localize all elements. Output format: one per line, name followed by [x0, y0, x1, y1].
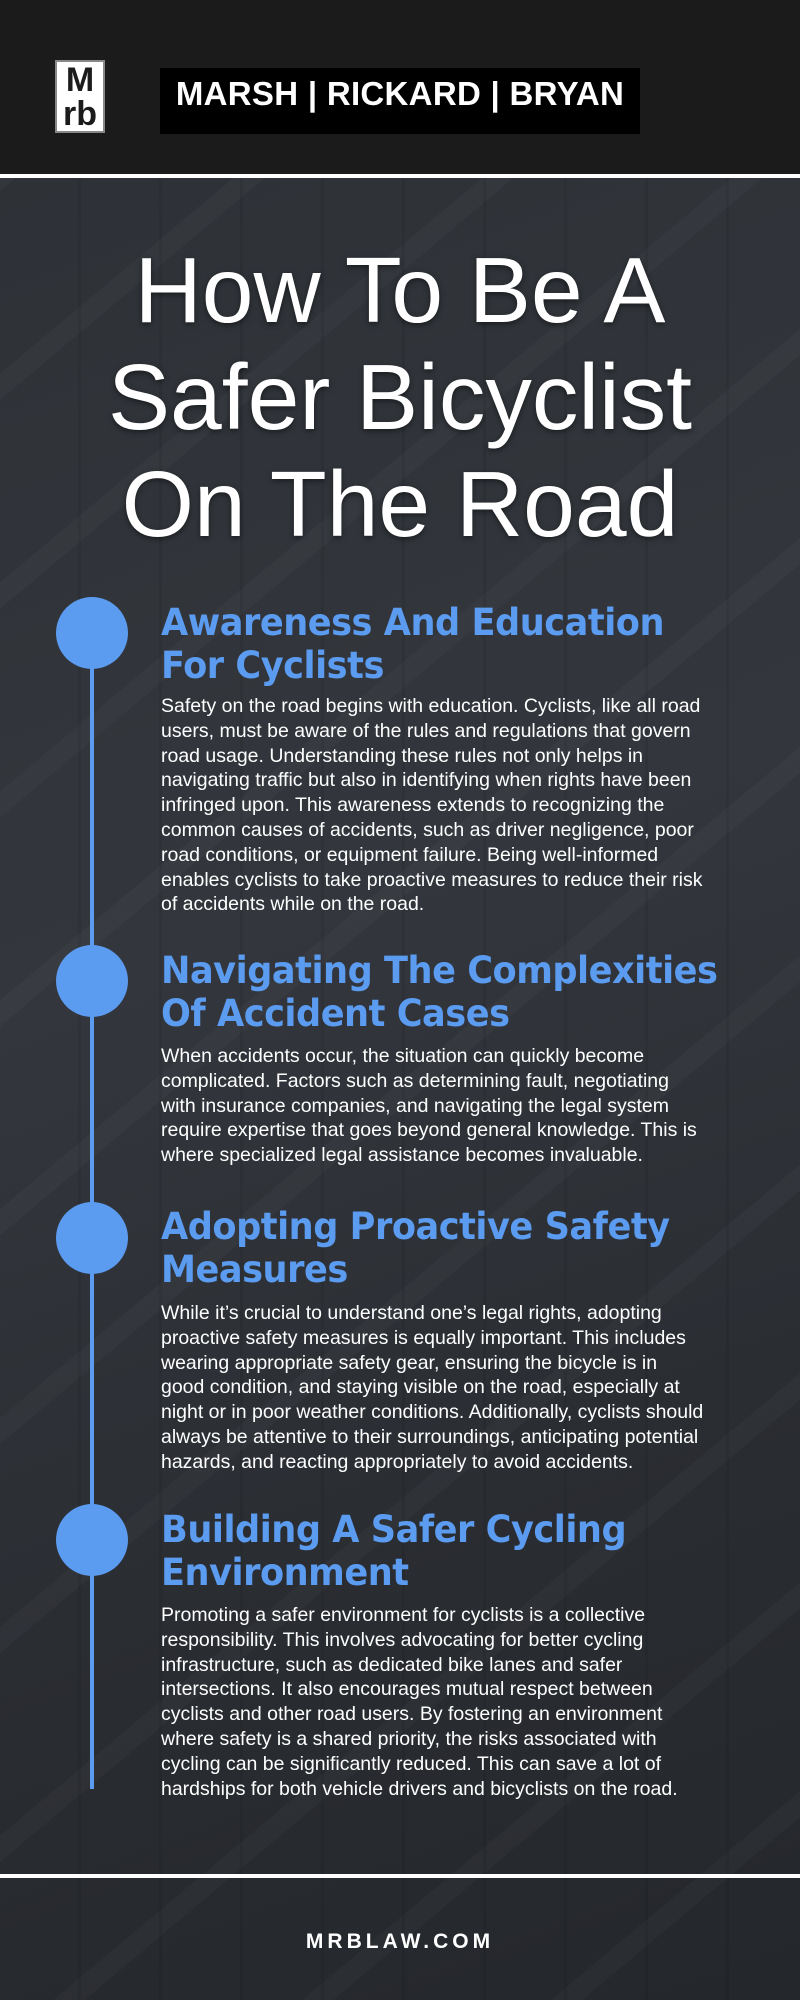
body 1: of accidents while on the road. — [161, 893, 424, 915]
icon: circle 4 — [56, 1504, 128, 1576]
heading 3: Adopting Proactive Safety — [161, 1205, 670, 1248]
title: On The Road — [122, 452, 678, 556]
body 4: responsibility. This involves advocating for better cycling — [161, 1629, 643, 1651]
logo icon: rb — [63, 95, 97, 133]
body 2: complicated. Factors such as determining fault, negotiating — [161, 1070, 669, 1092]
body 1 — [161, 695, 702, 915]
heading 2: Navigating The Complexities — [161, 949, 717, 992]
icon: circle — [56, 597, 128, 669]
heading 2: Of Accident Cases — [161, 992, 510, 1035]
body 3: wearing appropriate safety gear, ensuring the bicycle is in — [161, 1352, 657, 1374]
body 1: common causes of accidents, such as driver negligence, poor — [161, 819, 694, 841]
body 1: navigating traffic but also in identifying when rights have been — [161, 769, 691, 791]
icon: circle 3 — [56, 1202, 128, 1274]
body 3 — [161, 1302, 703, 1473]
body 1: road conditions, or equipment failure. Being well-informed — [161, 844, 658, 866]
body 4: where safety is a shared priority, the risks associated with — [161, 1728, 657, 1750]
body 4 — [161, 1604, 678, 1800]
body 4: Promoting a safer environment for cyclists is a collective — [161, 1604, 645, 1626]
body 4: hardships for both vehicle drivers and bicyclists on the road. — [161, 1778, 678, 1800]
footer url: MRBLAW.COM — [306, 1930, 494, 1953]
firm name — [160, 68, 640, 134]
title: How To Be A — [135, 238, 665, 342]
body 1: users, must be aware of the rules and regulations that govern — [161, 720, 691, 742]
logo icon: M — [66, 61, 94, 99]
body 3: good condition, and staying visible on the road, especially at — [161, 1376, 680, 1398]
body 3: While it’s crucial to understand one’s legal rights, adopting — [161, 1302, 662, 1324]
title: Safer Bicyclist — [108, 345, 692, 449]
body 2 — [161, 1045, 697, 1166]
heading 4 — [161, 1508, 626, 1594]
heading 1: Awareness And Education — [161, 601, 664, 644]
body 1: enables cyclists to take proactive measures to reduce their risk — [161, 869, 702, 891]
body 2: where specialized legal assistance becomes invaluable. — [161, 1144, 643, 1166]
icon: circle 2 — [56, 945, 128, 1017]
body 2: with insurance companies, and navigating the legal system — [161, 1095, 669, 1117]
body 3: proactive safety measures is equally important. This includes — [161, 1327, 686, 1349]
heading 4: Building A Safer Cycling — [161, 1508, 626, 1551]
firm name: MARSH | RICKARD | BRYAN — [176, 75, 624, 112]
body 4: cyclists and other road users. By fostering an environment — [161, 1703, 662, 1725]
heading 4: Environment — [161, 1551, 409, 1594]
title — [108, 238, 692, 556]
body 1: road usage. Understanding these rules not only helps in — [161, 745, 643, 767]
section 1 — [56, 597, 128, 669]
body 2: When accidents occur, the situation can quickly become — [161, 1045, 644, 1067]
body 2: require expertise that goes beyond general knowledge. This is — [161, 1119, 697, 1141]
body 3: night or in poor weather conditions. Additionally, cyclists should — [161, 1401, 703, 1423]
body 4: intersections. It also encourages mutual respect between — [161, 1678, 653, 1700]
body 1: Safety on the road begins with education. Cyclists, like all road — [161, 695, 700, 717]
body 4: infrastructure, such as dedicated bike lanes and safer — [161, 1654, 622, 1676]
header — [0, 0, 800, 175]
timeline line — [90, 633, 94, 1789]
heading 1 — [161, 601, 664, 687]
body 3: always be attentive to their surroundings, anticipating potential — [161, 1426, 698, 1448]
heading 3 — [161, 1205, 670, 1291]
heading 3: Measures — [161, 1248, 348, 1291]
heading 2 — [161, 949, 717, 1035]
body 3: hazards, and reacting appropriately to avoid accidents. — [161, 1451, 633, 1473]
logo icon — [55, 60, 105, 133]
body 4: cycling can be significantly reduced. This can save a lot of — [161, 1753, 661, 1775]
body 1: infringed upon. This awareness extends to recognizing the — [161, 794, 664, 816]
heading 1: For Cyclists — [161, 644, 384, 687]
